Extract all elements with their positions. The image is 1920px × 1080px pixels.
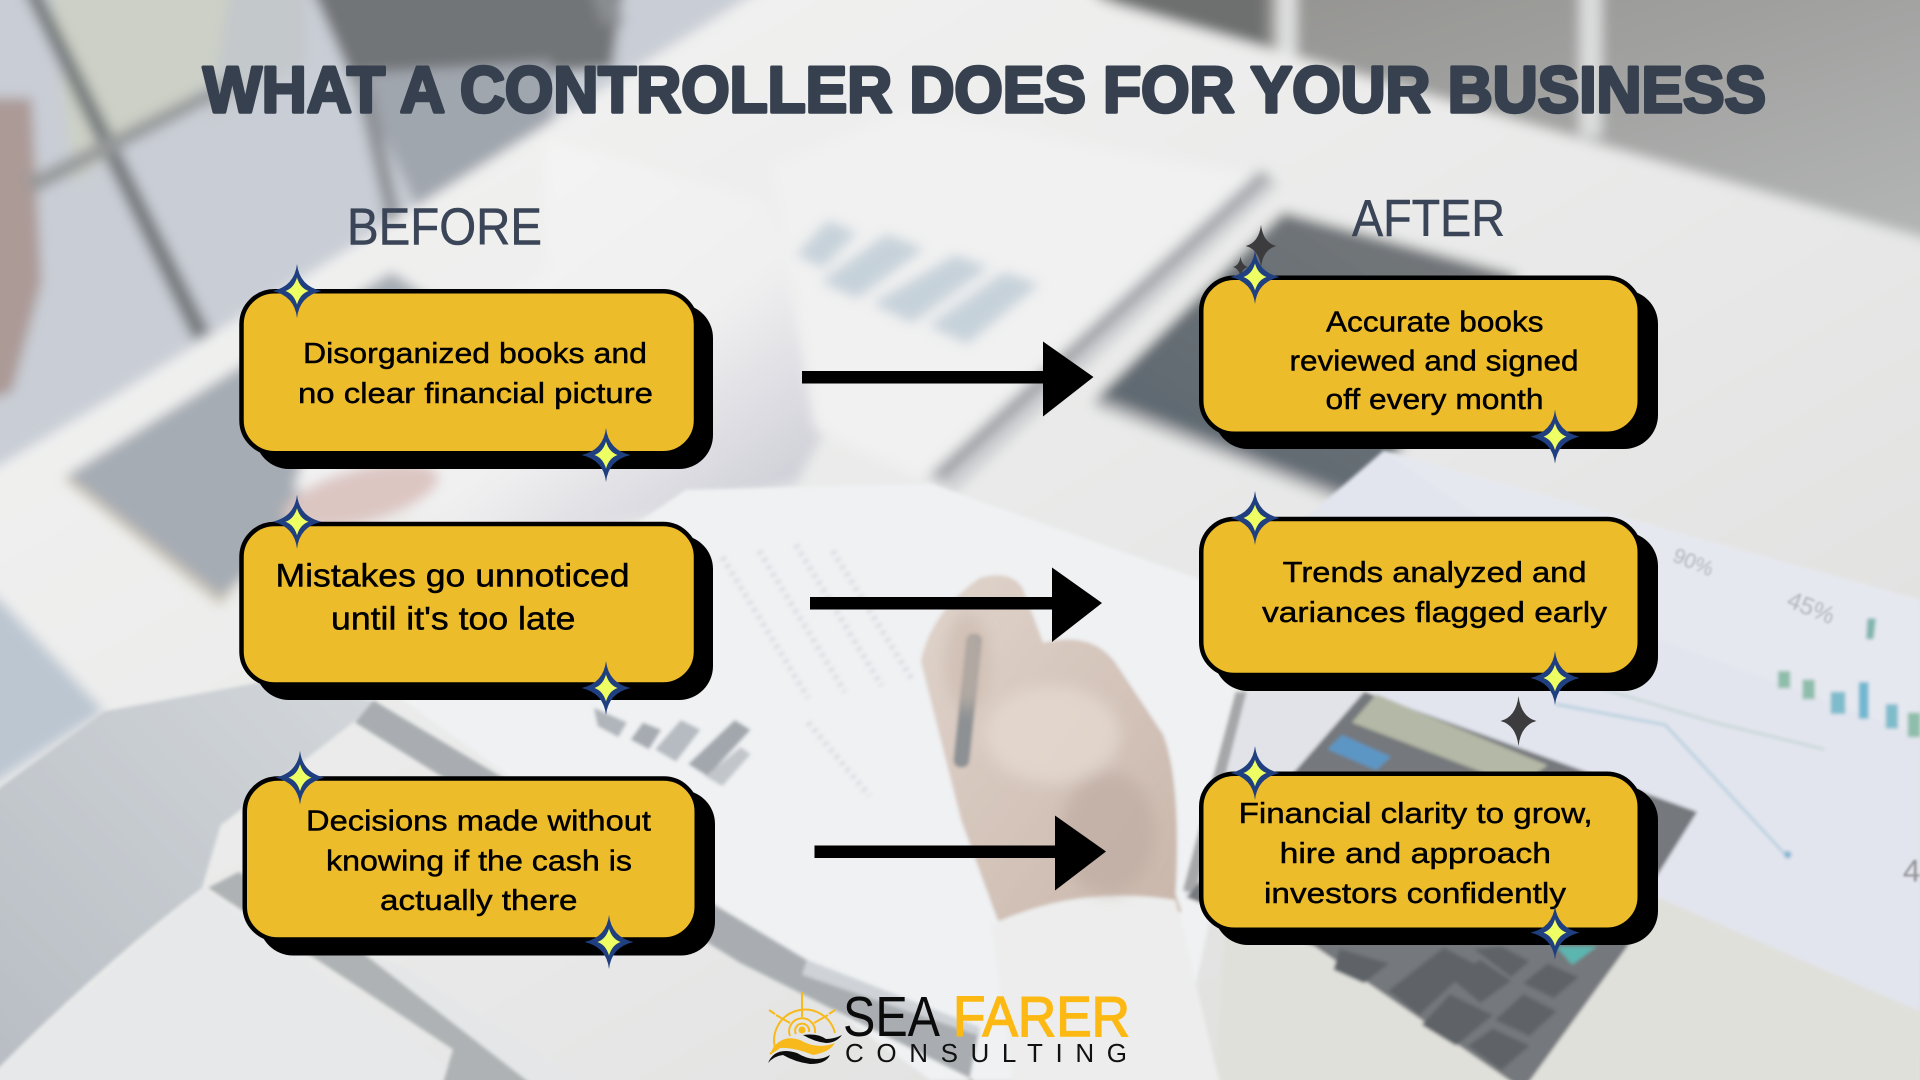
cuff [992,896,1224,1080]
paper edge band [355,700,980,1080]
left office window area [0,0,808,478]
panel: before card 1 [242,264,713,482]
clipboard documents [771,110,1267,484]
background: blurred desk photo: 45% [1783,587,1839,630]
logo wordmark: farer: FARER [953,985,1130,1049]
arrow: row 2 [810,568,1102,642]
panel: before card 3: knowing if the cash is [326,846,632,878]
panel: after card 3: Financial clarity to grow, [1239,798,1593,830]
logo wordmark: sea: SEA [843,985,940,1049]
panel: after card 3: hire and approach [1280,838,1551,870]
panel: after card 1: Accurate books [1326,306,1544,338]
panel: after card 1: off every month [1326,384,1544,416]
panel: after card 3: investors confidently [1264,878,1567,910]
rolled paper [294,137,833,539]
logo wordmark: consulting: CONSULTING [845,1038,1127,1068]
panel: before card 1: Disorganized books and [303,338,647,370]
panel: after card 2: Trends analyzed and [1283,557,1586,589]
desk corner lower right [1212,898,1920,1080]
hand [921,575,1182,921]
icon: ship wheel and waves [768,992,842,1064]
panel: before card 2 [242,495,713,715]
tablet [1098,212,1518,496]
decorative dark sparkle over calculator [1500,696,1536,746]
panel: before card 3: Decisions made without [306,806,651,838]
hand shading [945,612,1155,894]
panel: after card 1: reviewed and signed [1290,346,1578,378]
calculator [1187,692,1697,1080]
logo: Sea Farer Consulting [768,985,1130,1068]
sleeve [0,676,373,1080]
central paper [392,484,1249,1080]
panel: before card 3 [245,751,715,969]
panel: after card 3 [1201,746,1658,960]
top right background wall [1078,0,1920,245]
panel: after card 1 [1201,250,1658,464]
right paper [1224,451,1920,1011]
chart marks [1866,618,1876,639]
panel: after card 2: variances flagged early [1262,597,1608,629]
title: WHAT A CONTROLLER DOES FOR YOUR BUSINESS [203,53,1766,126]
heading: before: BEFORE [347,198,542,256]
grey chart bars on paper [594,708,627,737]
heading: after: AFTER [1352,190,1505,248]
left notebook [67,272,441,596]
panel: before card 2: Mistakes go unnoticed [276,558,630,594]
background: blurred desk photo: 90% [1670,544,1717,581]
panel: before card 1: no clear financial picture [298,378,653,410]
arrow: row 1 [802,342,1094,416]
arrow: row 3 [814,816,1106,890]
lower left blue gap [0,582,104,796]
calculator tray [1183,692,1371,898]
paper data columns [722,545,912,796]
panel: before card 2: until it's too late [331,600,576,636]
decorative dark sparkles near after card [1233,225,1276,278]
panel: after card 2 [1201,491,1658,705]
panel: before card 3: actually there [380,885,578,917]
